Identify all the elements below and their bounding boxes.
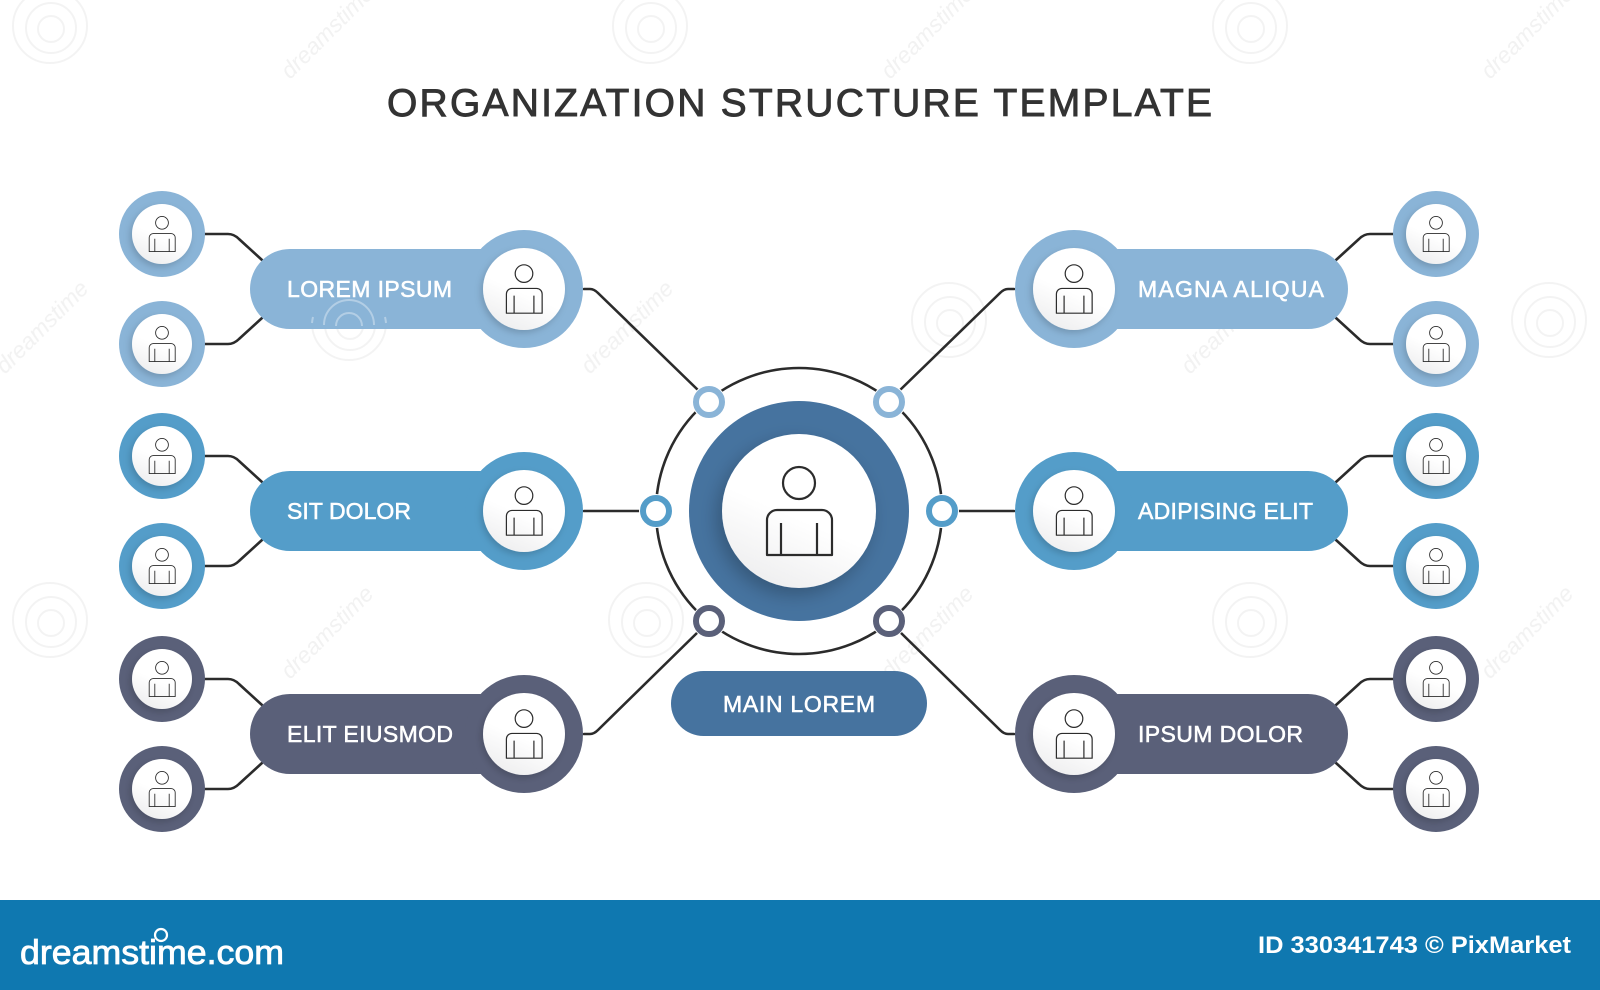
panel: magna aliqua group: [1015, 191, 1479, 387]
panel: ipsum dolor group: [1015, 636, 1479, 832]
watermark pattern: dreamstime: [1475, 580, 1578, 684]
main label: [671, 671, 927, 736]
panel: adipising elit group: [1015, 413, 1479, 609]
central node: [689, 401, 909, 621]
watermark pattern: [0, 0, 1586, 684]
panel: sit dolor group: [119, 413, 583, 609]
watermark pattern: dreamstime: [875, 580, 978, 684]
panel: sit dolor group: SIT DOLOR: [287, 498, 411, 524]
watermark pattern: dreamstime: [1175, 275, 1278, 379]
footer logo: dreamstime.com: [20, 934, 284, 972]
panel: lorem ipsum group: LOREM IPSUM: [287, 276, 452, 302]
panel: lorem ipsum group: [119, 191, 583, 387]
panel: adipising elit group: ADIPISING ELIT: [1138, 498, 1313, 524]
ring nodes: [639, 385, 959, 638]
watermark pattern: dreamstime: [575, 275, 678, 379]
connector lines: [205, 234, 1393, 789]
watermark on pill: [312, 300, 386, 326]
panel: elit eiusmod group: [119, 636, 583, 832]
watermark pattern: dreamstime: [275, 580, 378, 684]
panel: ipsum dolor group: IPSUM DOLOR: [1138, 721, 1303, 747]
panel: elit eiusmod group: ELIT EIUSMOD: [287, 721, 453, 747]
footer bar: [0, 900, 1600, 990]
main label: MAIN LOREM: [723, 691, 875, 717]
title: ORGANIZATION STRUCTURE TEMPLATE: [387, 82, 1212, 125]
panel: magna aliqua group: MAGNA ALIQUA: [1138, 276, 1325, 302]
footer credit: ID 330341743 © PixMarket: [1258, 932, 1571, 959]
